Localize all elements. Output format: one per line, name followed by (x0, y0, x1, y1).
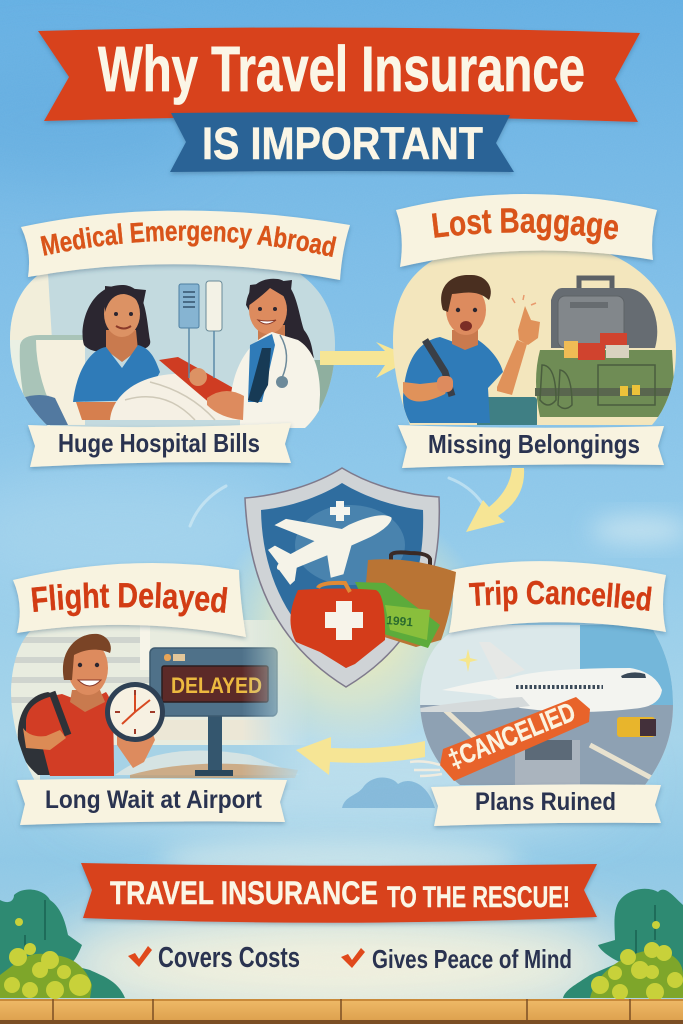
boxes (564, 341, 578, 358)
heading: Flight Delayed (32, 582, 228, 616)
benefit: peace of mind: Gives Peace of Mind (372, 944, 572, 974)
red chart (159, 357, 232, 401)
doctor (246, 279, 314, 358)
heading ribbon (21, 210, 350, 280)
caption ribbon (17, 778, 287, 825)
airplane icon (259, 479, 405, 598)
caption: Plans Ruined (475, 788, 616, 816)
traveller (18, 692, 50, 775)
luggage (617, 717, 655, 737)
signboard (208, 715, 222, 773)
sky tint (295, 505, 405, 585)
bed (20, 335, 85, 425)
money (355, 582, 440, 648)
shield emblem (245, 468, 456, 687)
heading: Trip Cancelled (468, 580, 652, 612)
airplane (442, 668, 662, 712)
caption: Huge Hospital Bills (58, 428, 260, 458)
blue sub-ribbon (170, 112, 514, 172)
IV bags (179, 284, 199, 328)
panel: trip cancelled (410, 561, 673, 830)
scene: hospital (10, 264, 335, 428)
heading ribbon (13, 563, 246, 637)
rescue ribbon: TO THE RESCUE! (387, 881, 570, 914)
green bag (536, 350, 676, 417)
shield emblem: 1991 (386, 613, 414, 629)
panel: flight delayed (11, 563, 298, 829)
scene: airport wait (11, 620, 298, 780)
cancelled tag (410, 697, 590, 781)
caption ribbon (431, 784, 661, 826)
small cross (330, 501, 350, 521)
rescue ribbon (81, 863, 597, 923)
glow behind shield (215, 500, 485, 750)
benefit: covers costs: Covers Costs (158, 942, 300, 974)
caption: Long Wait at Airport (45, 786, 263, 814)
scene: airport wait: DELAYED (171, 673, 262, 698)
wooden ledge (0, 999, 683, 1024)
heading ribbon (396, 194, 657, 267)
panel: medical emergency (10, 210, 351, 471)
suitcase (391, 552, 430, 568)
heading ribbon (449, 561, 666, 633)
caption: Missing Belongings (428, 429, 640, 459)
shield face (261, 483, 423, 668)
first aid bag (290, 588, 385, 668)
plants: left (0, 890, 125, 999)
heading: Lost Baggage (432, 208, 618, 244)
panel: lost baggage (393, 194, 676, 472)
white cross (325, 601, 363, 640)
scene: airplane on runway (420, 625, 673, 785)
arrow: trip cancelled to flight delayed (296, 737, 425, 775)
plants: right (563, 889, 683, 1001)
shield frame (245, 468, 439, 687)
subtitle text: IS IMPORTANT (202, 118, 483, 169)
caption ribbon (398, 425, 664, 468)
clock (105, 682, 165, 742)
scene: traveller and bags (393, 250, 676, 425)
faint arc strokes (190, 478, 482, 526)
benefit: covers costs (128, 942, 300, 974)
title ribbon (38, 27, 640, 172)
arrow: medical to lost baggage (320, 342, 414, 378)
caption ribbon (28, 423, 291, 467)
cancelled tag: ‡CANCELIED (444, 697, 579, 775)
man (403, 337, 503, 423)
rescue text: TRAVEL INSURANCE (110, 875, 378, 911)
suitcase grey (579, 278, 612, 290)
red ribbon (38, 27, 640, 122)
woman patient (83, 285, 150, 352)
heading: Medical Emergency Abroad (40, 222, 336, 257)
arrow: lost baggage to shield (466, 468, 524, 532)
